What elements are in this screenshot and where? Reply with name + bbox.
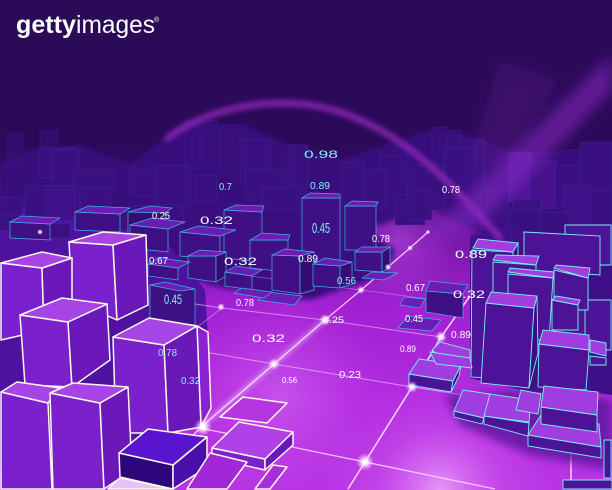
cube middle [20,298,110,387]
number labels: 0.25 [323,315,344,325]
number labels: 0.32 [453,289,485,301]
number labels: 0.23 [339,370,361,381]
number labels: 0.78 [442,185,460,196]
distant city mass [0,125,612,300]
dark mass behind right cluster [470,215,612,395]
number labels: 0.98 [304,149,338,161]
number labels: 0.45 [164,291,182,307]
logo: getty images: getty [16,11,76,39]
number labels: 0.89 [451,330,471,341]
number labels: 0.45 [405,314,423,325]
low tile right [255,465,287,489]
grid lines [142,232,571,489]
number labels: 0.25 [152,211,170,222]
number labels [149,149,487,387]
mid-field buildings left and centre [10,193,468,331]
cube bottom centre [50,383,132,489]
low tile [187,453,247,489]
flat block [212,422,293,470]
number labels: 0.56 [337,276,356,287]
glowing nodes [37,229,447,471]
shadow under right tiles [445,390,612,470]
number labels: 0.78 [236,298,254,309]
number labels: 0.67 [149,256,168,267]
cube back right [69,232,148,320]
distant city skyline [0,120,612,238]
number labels: 0.7 [219,182,232,193]
side outline behind tall cube [197,326,211,427]
near buildings bottom left [1,232,293,489]
light streak [420,55,612,240]
bright diagonal beam [200,320,325,428]
number labels: 0.32 [252,333,285,345]
pale plate [108,478,172,489]
cube bottom left [1,382,60,489]
number labels: 0.32 [181,376,200,387]
tile [220,397,287,423]
number labels: 0.89 [310,181,330,192]
number labels: 0.78 [158,348,177,359]
number labels: 0.56 [282,376,298,385]
number labels: 0.89 [400,344,416,354]
light arc [168,103,500,238]
number labels: 0.89 [455,249,487,261]
dark cube [119,429,207,489]
logo: getty images: images [76,11,155,39]
number labels: 0.45 [312,220,330,237]
dark mass behind near buildings [0,205,212,470]
number labels: 0.32 [224,256,257,268]
logo: getty images: ® [154,16,160,24]
number labels: 0.78 [372,234,390,245]
right side buildings back row [409,225,612,489]
logo: getty images [16,11,160,39]
cube back left [1,252,72,340]
number labels: 0.89 [298,254,318,265]
cube tall [113,318,201,433]
number labels: 0.67 [406,283,425,294]
number labels: 0.32 [200,215,233,227]
